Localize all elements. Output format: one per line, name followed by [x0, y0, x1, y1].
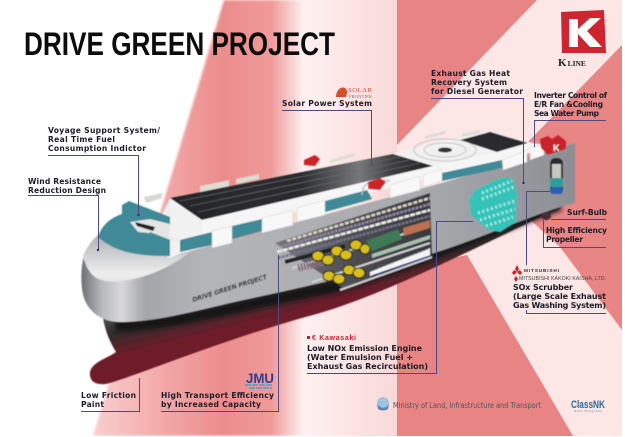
callout: wind resistance: Wind Resistance [28, 177, 101, 186]
logo: Solar Frontier [336, 87, 373, 99]
logo: Solar Frontier: SOLAR [348, 87, 373, 94]
logo: K Line: KLINE [558, 57, 586, 69]
red vents [304, 155, 390, 195]
callout: low NOx engine [307, 222, 473, 374]
superstructure base [150, 198, 212, 258]
callout: high efficiency propeller: Propeller [546, 235, 583, 244]
hull side [81, 143, 575, 322]
callout: exhaust gas heat recovery: Exhaust Gas Heat [431, 69, 510, 78]
callout: high transport efficiency: by Increased Capacity [161, 400, 261, 409]
logo: ClassNK: Ship Progress [574, 409, 602, 413]
callout: low NOx engine: Low NOx Emission Engine [307, 344, 423, 353]
callout: low NOx engine: Exhaust Gas Recirculation) [307, 362, 428, 371]
callout: voyage support [48, 126, 160, 216]
callout: inverter control: Sea Water Pump [534, 109, 600, 118]
car decks upper [277, 198, 430, 262]
logo: Mitsubishi [512, 265, 606, 282]
title: DRIVE GREEN PROJECT [24, 26, 335, 62]
callout: exhaust gas heat recovery: Recovery System [431, 78, 507, 87]
ministry text: Ministry of Land, Infrastructure and Transport [393, 401, 541, 410]
logo: Mitsubishi: MITSUBISHI KAKOKI KAISHA, LTD. [519, 276, 606, 282]
callout: solar power [282, 99, 372, 166]
yellow trucks [312, 240, 370, 284]
white side boxes [212, 144, 544, 248]
white deck [170, 132, 545, 240]
logo: K Line [558, 10, 606, 69]
callout: wind resistance: Reduction Design [28, 186, 106, 195]
funnel red K mark [540, 135, 566, 155]
bow upper surface [83, 226, 190, 281]
deck top boxes [200, 130, 480, 192]
callout: SOx scrubber: (Large Scale Exhaust [513, 292, 606, 301]
cutaway cargo hold [275, 193, 432, 290]
callout: inverter control [534, 91, 608, 147]
ship name on hull: DRIVE GREEN PROJECT [191, 274, 269, 304]
callout: exhaust gas heat recovery: for Diesel Generator [431, 87, 523, 96]
logo: Mitsubishi: MITSUBISHI [524, 268, 560, 274]
callout: high transport efficiency: High Transport Efficiency [161, 391, 274, 400]
callout: low friction paint: Paint [81, 400, 104, 409]
logo: ClassNK [571, 399, 605, 413]
callout: exhaust gas heat recovery [431, 69, 525, 184]
callout: voyage support: Voyage Support System/ [48, 126, 160, 135]
callout: SOx scrubber [513, 283, 606, 314]
car deck floors [292, 226, 432, 290]
funnel red K mark: K [553, 143, 560, 153]
logo: Solar Frontier: FRONTIER [349, 94, 372, 99]
callout: low friction paint [81, 378, 140, 412]
logo: ministry emblem [377, 397, 389, 410]
white side band [202, 143, 545, 236]
callout: SOx scrubber: Gas Washing System) [513, 301, 606, 310]
battery funnel [550, 158, 563, 194]
cars [298, 262, 325, 268]
bow deck teal [98, 214, 172, 256]
callout: high efficiency propeller [544, 220, 607, 248]
engine [469, 178, 517, 232]
helipad circle [414, 139, 476, 161]
bridge [122, 193, 180, 258]
callout: inverter control: E/R Fan &Cooling [534, 100, 603, 109]
ship illustration [81, 130, 575, 384]
callout: surf-bulb: Surf-Bulb [567, 208, 608, 217]
callout: SOx scrubber: SOx Scrubber [513, 283, 573, 292]
callout: voyage support: Consumption Indictor [48, 144, 146, 153]
callout: solar power: Solar Power System [282, 99, 372, 108]
leader: funnel to scrubber [526, 192, 550, 265]
teal side strips [180, 160, 502, 252]
propeller [541, 212, 551, 220]
solar panel forward [170, 154, 433, 220]
callout: inverter control: Inverter Control of [534, 91, 608, 100]
solar panel aft [460, 132, 528, 152]
green cargo [366, 229, 402, 251]
callout: low friction paint: Low Friction [81, 391, 136, 400]
lower hull and bulbous bow [90, 190, 575, 384]
train [370, 248, 430, 276]
black waterline shadow [115, 205, 560, 326]
callout: high transport efficiency [161, 255, 278, 412]
logo: JMU: JMU [246, 370, 274, 386]
callout: voyage support: Real Time Fuel [48, 135, 115, 144]
callout: wind resistance [28, 177, 106, 251]
logo: ClassNK: ClassNK [571, 399, 605, 411]
callout: low NOx engine: (Water Emulsion Fuel + [307, 353, 413, 362]
callout: low NOx engine: € Kawasaki [312, 335, 356, 342]
callout: surf-bulb [551, 208, 608, 220]
callout: high efficiency propeller: High Efficiency [546, 226, 607, 235]
